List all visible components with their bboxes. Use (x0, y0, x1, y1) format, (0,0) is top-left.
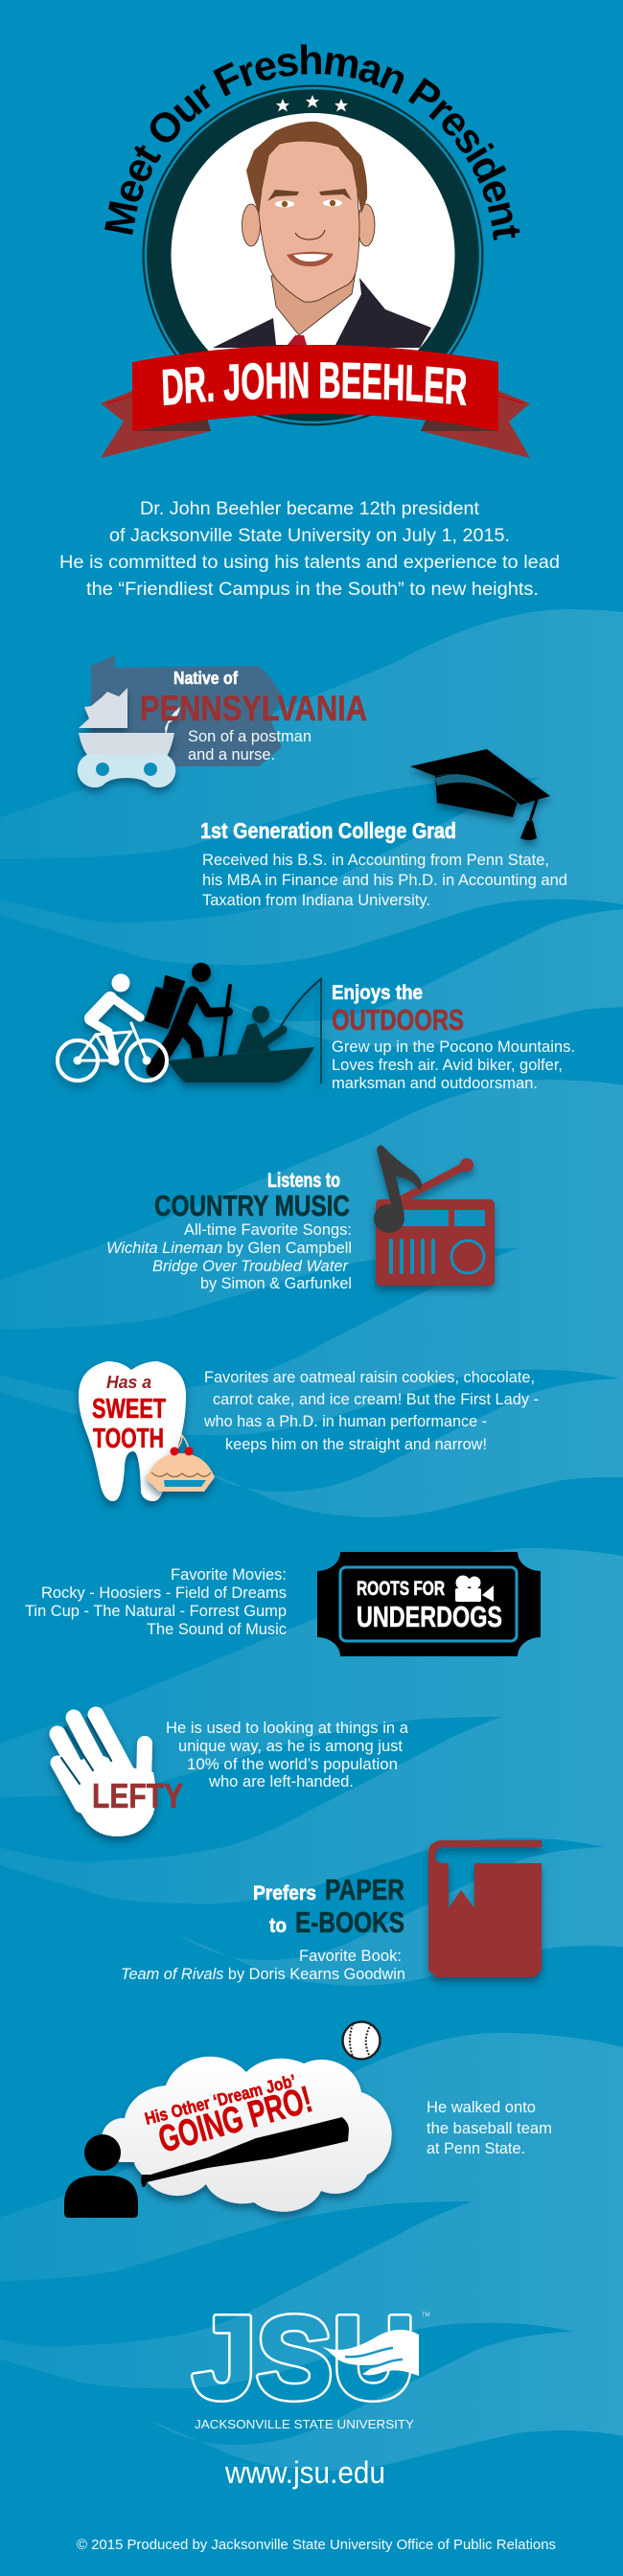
text: walked onto baseball team: the baseball team (427, 2120, 552, 2137)
text: favorites (203, 1369, 539, 1453)
ribbon banner (101, 345, 530, 458)
intro text block: the “Friendliest Campus in the South” to new heights. (86, 580, 539, 600)
text: favorite book: Team of Rivals by Doris Kearns Goodwin (121, 1966, 405, 1983)
text: outdoors detail: Grew up in the Pocono Mountains. (332, 1038, 575, 1056)
icon: radio with music note (374, 1145, 495, 1286)
icon: hiker (146, 963, 230, 1070)
text: outdoors detail: Loves fresh air. Avid biker, golfer, (332, 1057, 563, 1074)
label: underdogs: UNDERDOGS (357, 1600, 502, 1633)
text: degrees: Received his B.S. in Accounting from Penn State, (202, 852, 549, 869)
text: favorite movies: Tin Cup - The Natural - Forrest Gump (25, 1603, 287, 1620)
icon: baseball (343, 2021, 380, 2060)
heading in tooth (92, 1373, 166, 1454)
panel: going pro (64, 2021, 552, 2218)
heading in tooth: TOOTH (93, 1424, 164, 1454)
icon: cyclist, hiker and fisherman (58, 963, 322, 1083)
panel: country music (106, 1145, 495, 1292)
text: copyright: © 2015 Produced by Jacksonville State University Office of Public Relations (77, 2537, 556, 2553)
logo: JSU: JSU (193, 2292, 415, 2423)
text: left-handed: unique way, as he is among just (178, 1738, 403, 1755)
heading: Listens to: Listens to (267, 1170, 340, 1192)
label: roots for: ROOTS FOR (357, 1578, 445, 1600)
icon: left hand (56, 1715, 155, 1836)
panel: enjoys the outdoors (58, 963, 575, 1092)
heading: Native of: Native of (173, 669, 239, 688)
title: Meet Our Freshman President: Meet Our Freshman President (104, 44, 519, 240)
panel: sweet tooth (79, 1361, 539, 1501)
heading: Enjoys the: Enjoys the (332, 982, 423, 1004)
text: favorite songs: All-time Favorite Songs: (184, 1221, 352, 1239)
intro text block (59, 499, 560, 600)
panel: roots for underdogs (25, 1552, 541, 1656)
text: favorites: Favorites are oatmeal raisin cookies, chocolate, (204, 1369, 535, 1386)
icon: graduation cap (410, 749, 550, 840)
heading in tooth: Has a (106, 1373, 151, 1392)
panel: lefty (56, 1715, 409, 1836)
icon: tooth (79, 1361, 186, 1501)
text: going pro: GOING PRO! (154, 2079, 316, 2161)
text: favorite movies: Rocky - Hoosiers - Field of Dreams (41, 1584, 287, 1602)
heading: COUNTRY MUSIC: COUNTRY MUSIC (154, 1189, 350, 1222)
text: favorite songs: by Simon & Garfunkel (200, 1275, 352, 1292)
three stars (276, 95, 348, 111)
text: outdoors detail (332, 1038, 575, 1092)
text: parents: Son of a postman (188, 728, 312, 745)
heading: to E-BOOKS (269, 1905, 404, 1939)
text: outdoors detail: marksman and outdoorsman. (332, 1075, 538, 1092)
heading: 1st Generation College Grad (200, 818, 456, 843)
heading: Prefers PAPER: PAPER (325, 1873, 404, 1906)
icon: movie camera (455, 1575, 494, 1602)
icon: cyclist (58, 973, 167, 1081)
text: favorite movies (25, 1566, 287, 1638)
heading: to E-BOOKS: E-BOOKS (295, 1905, 404, 1939)
text: left-handed: who are left-handed. (208, 1773, 354, 1790)
badge ring (142, 84, 483, 425)
text: left-handed: 10% of the world’s population (187, 1756, 398, 1773)
portrait illustration (213, 122, 431, 348)
text: favorites: keeps him on the straight and narrow! (225, 1436, 487, 1453)
text: walked onto baseball team: at Penn State. (427, 2140, 525, 2157)
intro text block: Dr. John Beehler became 12th president (140, 499, 480, 519)
heading: LEFTY: LEFTY (92, 1776, 183, 1815)
text: favorite songs: Bridge Over Troubled Water (152, 1258, 349, 1275)
logo: JSU (190, 2313, 429, 2403)
text: favorites: carrot cake, and ice cream! But the First Lady - (213, 1391, 539, 1408)
logo: JSU: TM (422, 2313, 430, 2318)
panel: first generation college grad (200, 749, 567, 909)
text: favorite songs: Wichita Lineman by Glen Campbell (106, 1240, 352, 1257)
text: favorite songs (106, 1221, 352, 1292)
text: degrees: his MBA in Finance and his Ph.D. in Accounting and (202, 872, 567, 889)
text: university name: JACKSONVILLE STATE UNIVERSITY (195, 2417, 414, 2431)
header: portrait badge and ribbon (101, 44, 530, 458)
icon: thought cloud (101, 2057, 392, 2212)
text: his other dream job: His Other ‘Dream Job’ (143, 2071, 298, 2129)
heading: Prefers PAPER: Prefers (253, 1882, 316, 1904)
intro text block: of Jacksonville State University on July 1, 2015. (109, 526, 510, 546)
text: favorite movies: The Sound of Music (147, 1621, 287, 1638)
heading: Prefers PAPER (253, 1873, 404, 1906)
icon: book with bookmark (428, 1840, 542, 1977)
icon: pie (145, 1434, 215, 1492)
panel: paper over e-books (121, 1840, 542, 1983)
intro text block: He is committed to using his talents and experience to lead (59, 553, 560, 573)
icon: Pennsylvania state shape (91, 655, 283, 766)
heading: to E-BOOKS: to (269, 1915, 287, 1937)
icon: fisherman in boat (168, 978, 322, 1083)
icon: person (64, 2134, 138, 2218)
text: favorite movies: Favorite Movies: (171, 1566, 287, 1584)
text: left-handed: He is used to looking at things in a (166, 1720, 409, 1737)
text: left-handed (166, 1720, 409, 1790)
name on ribbon: DR. JOHN BEEHLER (163, 362, 466, 406)
heading: Pennsylvania: PENNSYLVANIA (140, 689, 367, 728)
text: favorite book: Favorite Book: (299, 1948, 402, 1965)
icon: baseball bat (141, 2117, 349, 2187)
text: degrees (202, 852, 567, 909)
text: favorite book (121, 1948, 405, 1983)
icon: movie ticket (317, 1552, 541, 1656)
footer: logo and credits (77, 2292, 556, 2553)
text: walked onto baseball team (427, 2099, 552, 2157)
text: walked onto baseball team: He walked onto (427, 2099, 536, 2116)
text: parents: and a nurse. (188, 746, 275, 764)
panel: native of Pennsylvania (78, 655, 367, 787)
heading in tooth: SWEET (92, 1394, 166, 1425)
text: degrees: Taxation from Indiana University. (202, 892, 430, 909)
text: parents (188, 728, 312, 764)
heading: OUTDOORS: OUTDOORS (332, 1003, 464, 1037)
icon: baby carriage (78, 688, 180, 787)
text: favorites: who has a Ph.D. in human performance - (203, 1413, 487, 1430)
text: website: www.jsu.edu (224, 2455, 385, 2490)
